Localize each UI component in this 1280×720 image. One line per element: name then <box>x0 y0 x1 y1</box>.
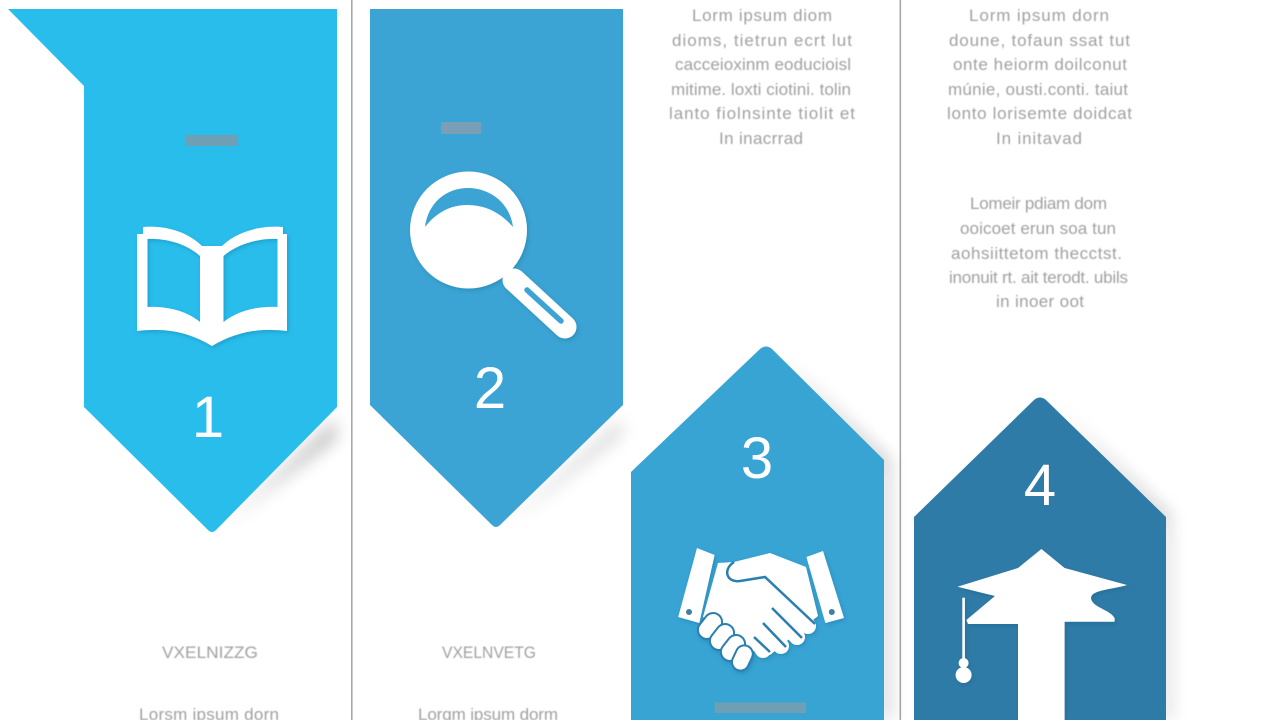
icon: open book <box>137 227 287 346</box>
text block: column 4 upper: múnie, ousti.conti. taiut <box>948 80 1128 99</box>
text block: column 4 lower: inonuit rt. ait terodt. ubils <box>949 268 1128 287</box>
divider line left <box>351 0 353 720</box>
text block: column 3 upper: mitime. loxti ciotini. tolin <box>671 80 851 99</box>
label: column 2 heading: VXELNVETG <box>442 643 536 662</box>
text block: column 4 lower: aohsiittetom thecctst. <box>951 244 1122 263</box>
text block: column 3 upper <box>669 6 855 148</box>
number 4: 4 <box>1024 453 1056 518</box>
text block: column 4 lower: in inoer oot <box>996 292 1084 311</box>
panel: step 2 ribbon <box>370 9 623 527</box>
panel: step 4 ribbon <box>914 398 1170 720</box>
grey bar 2 <box>441 122 481 134</box>
text block: column 4 upper: lonto lorisemte doidcat <box>947 104 1132 123</box>
text block: column 3 upper: Lorm ipsum diom <box>692 6 832 25</box>
text block: column 4 upper: onte heiorm doilconut <box>953 55 1127 74</box>
grey bar 1 <box>186 135 238 146</box>
text block: column 4 upper: Lorm ipsum dorn <box>969 6 1109 25</box>
text block: column 4 upper: doune, tofaun ssat tut <box>949 31 1130 50</box>
icon: magnifying glass <box>410 172 565 327</box>
text block: column 4 upper: In initavad <box>996 129 1082 148</box>
number 2: 2 <box>474 356 506 421</box>
text block: column 4 upper <box>947 6 1132 148</box>
text block: column 4 lower <box>949 194 1128 311</box>
icon: handshake <box>678 548 844 673</box>
label: column 1 heading: VXELNIZZG <box>162 643 258 662</box>
text block: column 4 lower: Lomeir pdiam dom <box>970 194 1107 213</box>
text block: column 3 upper: In inacrrad <box>719 129 803 148</box>
text block: column 3 upper: cacceioxinm eoducioisl <box>675 55 851 74</box>
text block: column 4 lower: ooicoet erun soa tun <box>960 219 1116 238</box>
number 1: 1 <box>192 385 224 450</box>
divider line right <box>900 0 901 720</box>
number 3: 3 <box>741 426 773 491</box>
icon: graduation cap <box>956 549 1127 720</box>
panel: step 3 ribbon <box>631 346 890 720</box>
text block: column 3 upper: dioms, tietrun ecrt lut <box>672 31 852 50</box>
panel: step 1 ribbon <box>8 9 337 532</box>
grey bar 3 <box>715 702 806 713</box>
text block: column 3 upper: lanto fiolnsinte tiolit et <box>669 104 855 123</box>
